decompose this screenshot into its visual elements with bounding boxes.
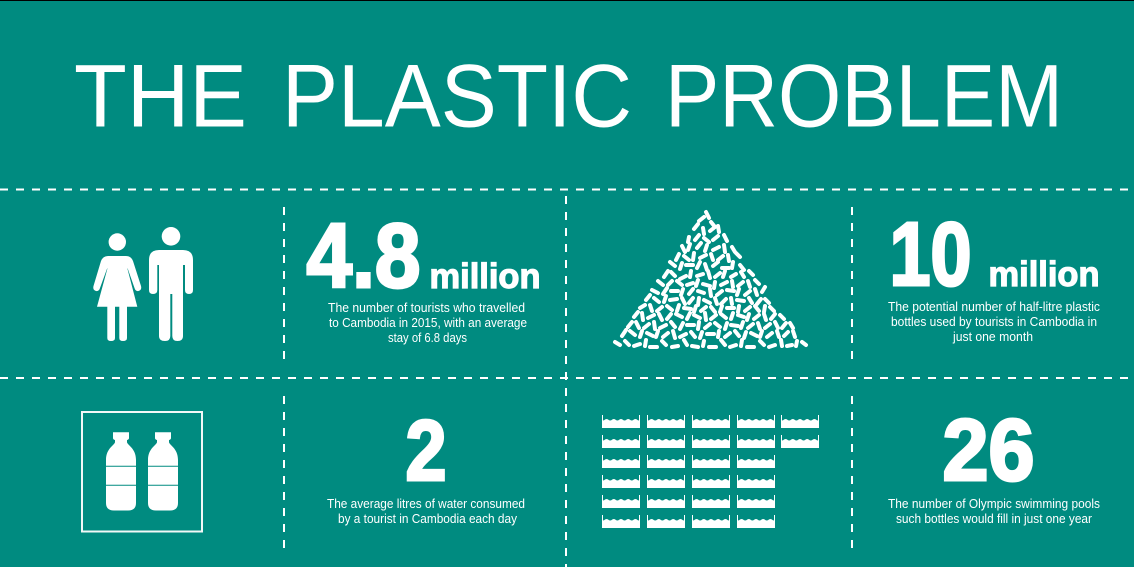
title: THE (74, 46, 247, 146)
title: PROBLEM (665, 46, 1063, 146)
caption: pools per year (888, 497, 1100, 526)
caption: bottles used: just one month (952, 330, 1033, 344)
icon: pile of bottles (615, 212, 806, 347)
caption: bottles used: The potential number of half-litre plastic (888, 300, 1100, 314)
caption: bottles used: bottles used by tourists in Cambodia in (891, 315, 1097, 329)
stat: 10 million: million (988, 255, 1100, 294)
panel: bottle pile (615, 205, 1100, 347)
panel: swimming pools (602, 402, 1100, 528)
stat: 10 million: 10 (890, 205, 972, 305)
stat: 10 million (890, 205, 1100, 305)
icon: woman and man (93, 227, 193, 341)
caption: bottles used (888, 300, 1100, 344)
stat: 2: 2 (406, 404, 446, 499)
caption: litres per day: The average litres of water consumed (327, 497, 525, 511)
caption: litres per day: by a tourist in Cambodia each day (338, 512, 518, 526)
icon: 26 swimming pools (602, 415, 819, 528)
caption: pools per year: such bottles would fill in just one year (896, 512, 1092, 526)
caption: tourists: stay of 6.8 days (388, 331, 467, 345)
panel: daily water (82, 404, 525, 532)
title: PLASTIC (282, 46, 632, 146)
panel: tourists (93, 206, 541, 345)
caption: pools per year: The number of Olympic swimming pools (888, 497, 1100, 511)
stat: 26: 26 (942, 402, 1034, 499)
icon: two bottles in a box (82, 412, 202, 532)
caption: litres per day (327, 497, 525, 526)
title (74, 46, 1063, 146)
caption: tourists: The number of tourists who travelled (328, 301, 525, 315)
stat: 4.8 million: 4.8 (306, 206, 420, 307)
stat: 4.8 million: million (430, 257, 540, 296)
caption: tourists: to Cambodia in 2015, with an average (329, 316, 527, 330)
stat: 4.8 million (306, 206, 540, 307)
caption: tourists (328, 301, 527, 345)
